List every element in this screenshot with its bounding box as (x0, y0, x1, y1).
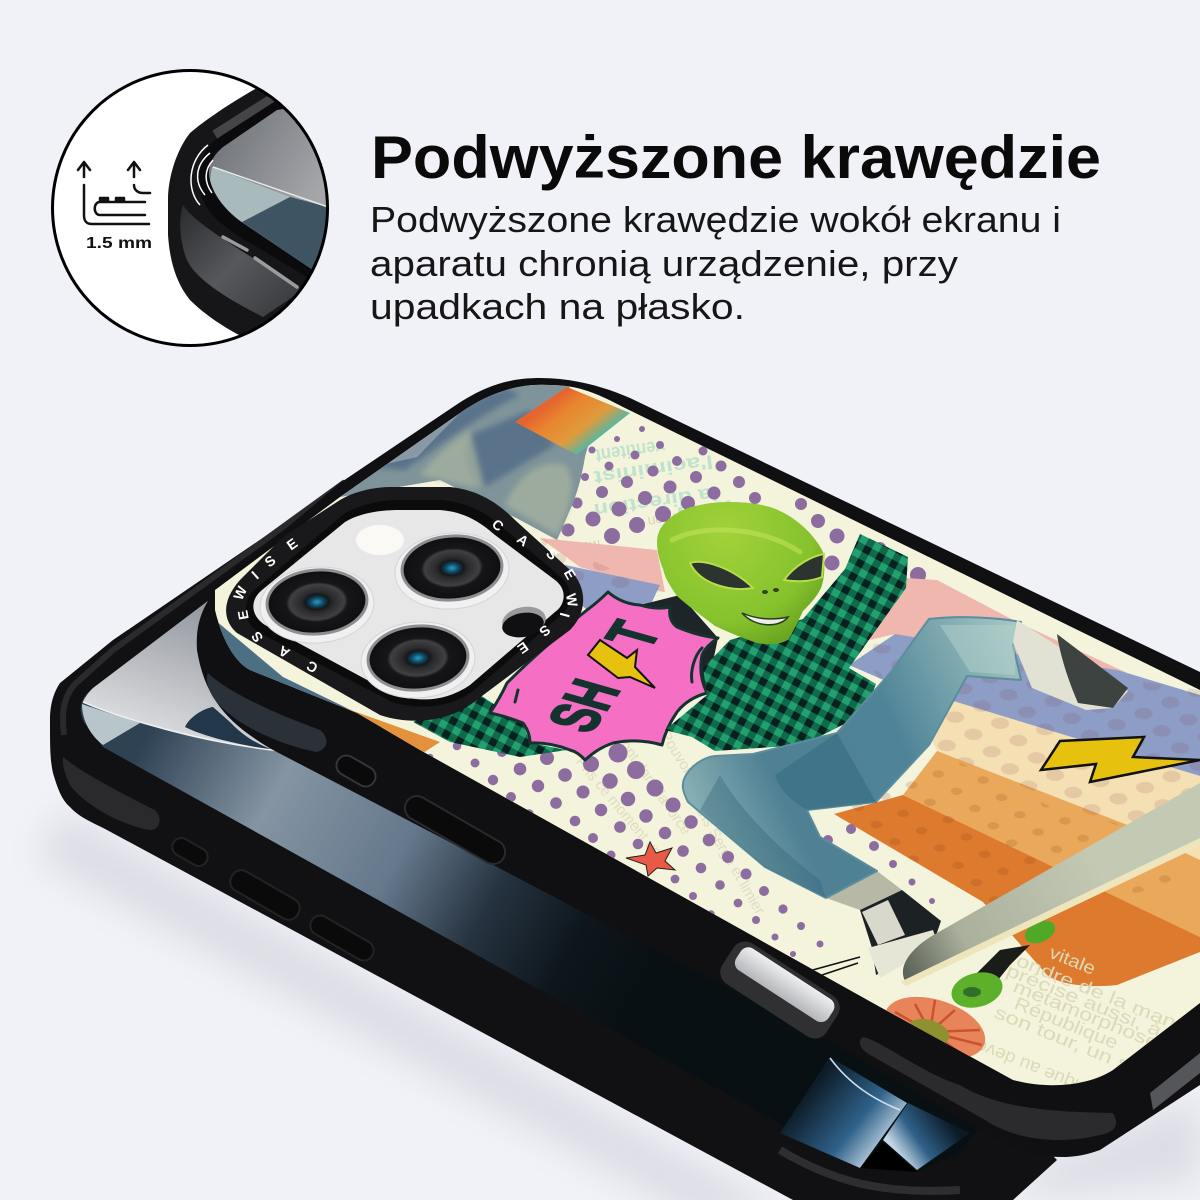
red star (626, 842, 675, 876)
side button small (333, 752, 379, 790)
stripe dots small (852, 758, 1170, 902)
faded french text: vitale (1047, 942, 1098, 979)
case top sheen (215, 95, 278, 135)
ring lettering: W (230, 583, 250, 602)
screen dark panel (242, 197, 340, 270)
faded french text: République (1012, 993, 1121, 1053)
green checked shirt (665, 534, 908, 751)
back phone corner pill (63, 757, 160, 830)
blue stripe right (849, 634, 1200, 776)
back phone case (50, 475, 1057, 1200)
case corner (168, 60, 340, 337)
faded left serif text: ont dans la force (617, 738, 694, 838)
flash (356, 525, 404, 555)
faded gray upside-down text: Mau (573, 537, 602, 557)
case profile (84, 185, 149, 224)
button highlights (223, 237, 297, 287)
burst text: SH (533, 673, 635, 739)
ring lettering: A (276, 643, 292, 661)
lightning bolt right (1041, 737, 1200, 782)
lower-left orange edge (345, 708, 440, 755)
circle background (52, 70, 328, 346)
ring lettering: I (557, 611, 573, 619)
side metal charging button (715, 936, 845, 1044)
shirt left piece (413, 695, 567, 757)
blob dark washes (375, 388, 555, 490)
jeans shading (700, 625, 1015, 898)
screen light panel (210, 167, 290, 222)
back screen dark wallpaper patch (185, 707, 273, 750)
raised-edge icon (78, 162, 150, 224)
camera plate (253, 510, 564, 699)
back phone screen (81, 497, 1000, 1172)
faded french text: ondre de la manière (1014, 950, 1200, 1047)
case sheen (180, 205, 303, 317)
skateboard edge (900, 838, 1200, 986)
white glass line (213, 167, 328, 207)
faded green upside-down text: la cr (671, 495, 734, 524)
faded french text: métamorphose (1011, 976, 1162, 1053)
description text (370, 199, 1061, 327)
alien eyes (690, 562, 753, 589)
description text: upadkach na płasko. (370, 286, 745, 327)
skateboard deck (903, 783, 1200, 983)
faded french text: ique au devoir (963, 1031, 1081, 1095)
faded left serif text (572, 728, 768, 918)
microphone cutout (500, 603, 548, 640)
pink stripe left (540, 538, 665, 592)
phone bumps (100, 198, 108, 201)
left arrow (78, 162, 90, 177)
pink stripe right (870, 578, 1128, 674)
skateboard front wheel (947, 967, 1007, 1013)
ring lettering: S (261, 552, 279, 570)
lens top right (400, 533, 504, 603)
right side speaker grill (1150, 1053, 1200, 1110)
inner black rim (198, 100, 345, 285)
jeans (683, 617, 1021, 898)
back phone lower highlight (780, 1150, 960, 1191)
lens top left (265, 567, 369, 637)
comic burst (490, 592, 718, 760)
dark orange stripe and block (834, 795, 1200, 986)
blue wallpaper right (883, 1103, 970, 1170)
back screen gray area (83, 497, 345, 770)
flower (877, 985, 993, 1071)
camera ring (226, 487, 583, 721)
wallpaper bright curves (830, 1058, 900, 1110)
skateboard rear wheel (1021, 916, 1059, 948)
soft shadows (40, 810, 1200, 1200)
blue stripe left (560, 565, 660, 610)
light orange stripe (903, 751, 1200, 937)
faded left serif text: Pouvoir politique (657, 728, 730, 831)
lower sneaker (860, 890, 941, 978)
description text: Podwyższone krawędzie wokół ekranu i (370, 199, 1061, 240)
back phone rim sheen (63, 482, 345, 735)
ring lettering: E (234, 609, 252, 621)
halftone dots upper field (562, 426, 926, 583)
ring inner lip (246, 500, 570, 707)
black wallpaper triangle (860, 1142, 917, 1172)
ring lettering: S (543, 545, 561, 563)
front phone (197, 370, 1200, 1157)
back phone volume and action buttons (169, 835, 377, 964)
faded left serif text: Pris ce moment une (572, 754, 671, 867)
alien highlights (672, 530, 800, 552)
blob pale washes (420, 430, 572, 535)
faded french text: précise aussi, à ret (1004, 960, 1196, 1054)
faded french text: son tour, un si (992, 1002, 1138, 1077)
blue wallpaper left (780, 1057, 907, 1168)
artwork paper base (200, 370, 1200, 1100)
close-up of phone corner (168, 60, 345, 337)
phone back artwork (200, 370, 1200, 1100)
burst text: T (591, 615, 676, 655)
lens mounts (257, 529, 512, 702)
back screen pale sliver (82, 704, 140, 745)
ring lettering: C (304, 658, 320, 676)
ring lettering: E (284, 535, 300, 553)
faded green upside-down text: l'aciminist (592, 450, 714, 488)
faded french text (980, 948, 1181, 1084)
alien head (657, 502, 824, 644)
heading: Podwyższone krawędzie (371, 124, 1101, 191)
ring lettering: I (248, 568, 262, 582)
feature circle (52, 60, 345, 346)
stripe dots large (540, 538, 1200, 826)
circle outline (52, 70, 328, 346)
right arrow (128, 162, 140, 177)
phone profile (95, 202, 145, 215)
halftone dots lower field (427, 742, 935, 957)
raised camera edge (134, 185, 150, 193)
lens bottom (366, 623, 470, 693)
front phone case (197, 378, 1200, 1157)
rainbow stripes (540, 538, 1200, 986)
ring lettering: W (563, 592, 581, 609)
back screen white curve (83, 702, 280, 751)
upper sneaker (1013, 620, 1128, 710)
faded green upside-down text (594, 440, 730, 514)
screen gray (209, 100, 340, 270)
orange teal patch (515, 387, 630, 455)
faded green upside-down text: la direction (593, 482, 719, 520)
ring lettering: E (515, 639, 531, 657)
faded gray upside-down text: -n lion (647, 509, 687, 530)
blue gray painted blob (340, 385, 600, 540)
ring outer bezel (226, 487, 583, 721)
ankle (826, 871, 902, 910)
description text: aparatu chronią urządzenie, przy (370, 243, 958, 284)
faded left serif text: dans Serge et limier (687, 794, 768, 918)
faded green upside-down text: ventitent (593, 435, 666, 466)
thickness label: 1.5 mm (86, 235, 152, 252)
burst yellow bolt (588, 640, 655, 688)
ring lettering: S (536, 622, 554, 640)
back phone (50, 475, 1057, 1200)
ring lettering: A (514, 531, 532, 549)
case left corner pill (207, 673, 326, 752)
ring lettering (230, 516, 581, 676)
impact arcs (191, 145, 213, 205)
faded gray upside-down text (584, 514, 675, 544)
cream stripe (925, 700, 1200, 860)
case lower pill highlight (860, 1037, 1116, 1140)
speed lines (812, 956, 860, 976)
dark backpack (640, 595, 718, 690)
alien nostrils (762, 588, 779, 594)
burst text (550, 618, 658, 732)
side button long (401, 792, 509, 868)
burst dash marks (515, 648, 702, 702)
alien mouth (742, 613, 788, 625)
ring lettering: S (248, 629, 266, 645)
ring lettering: E (561, 566, 579, 582)
ring lettering: C (489, 516, 507, 534)
skateboard truck (977, 945, 1030, 978)
lower-left painted edge teal (218, 623, 356, 712)
